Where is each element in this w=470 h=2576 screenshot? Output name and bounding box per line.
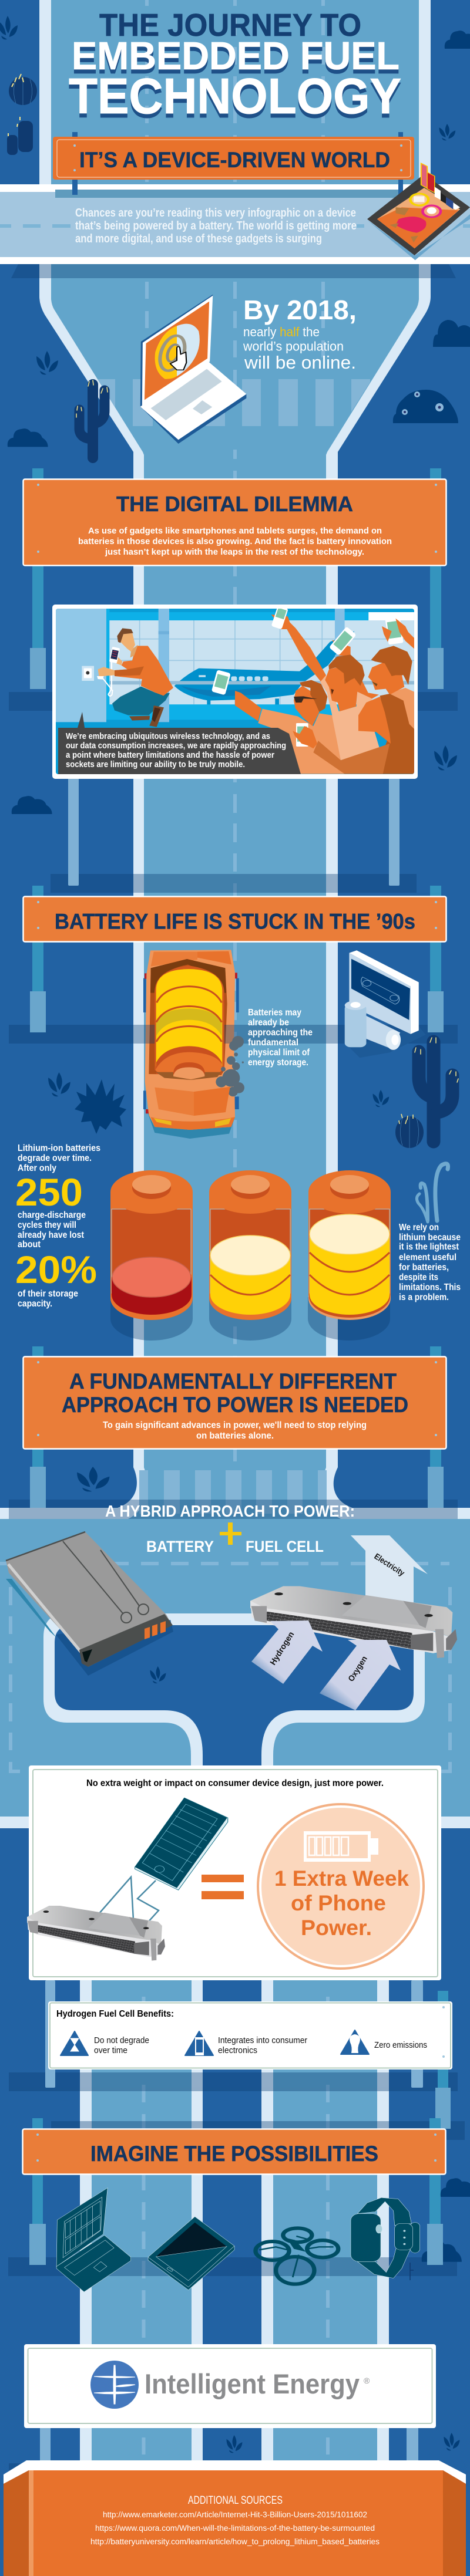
icon: laptop with globe xyxy=(140,295,246,444)
text: we rely on lithium: lithium because xyxy=(399,1233,461,1243)
shadow bands xyxy=(8,2072,465,2276)
plants bottom xyxy=(226,2433,459,2453)
footer: additional sources: http://www.emarketer.com/Article/Internet-Hit-3-Billion-Users-2015/1011602 xyxy=(103,2510,367,2519)
plus with labels battery and fuel cell: BATTERY xyxy=(146,1538,214,1555)
cell: degraded red xyxy=(110,1170,193,1320)
arrow: electricity xyxy=(351,1535,428,1602)
plants and bushes upper xyxy=(8,320,470,447)
icon: fuel cell xyxy=(250,1586,457,1658)
crowd holding phones xyxy=(235,606,414,774)
text: lithium-ion degradation stat: 20% xyxy=(15,1248,97,1291)
text: batteries may already: physical limit of xyxy=(248,1048,310,1058)
panel: airport scene xyxy=(52,605,418,779)
sign: battery life: BATTERY LIFE IS STUCK IN THE ’90s xyxy=(55,910,415,933)
title: TECHNOLOGY xyxy=(69,73,401,129)
text: lithium-ion degradation stat: capacity. xyxy=(18,1299,52,1309)
sign: a fundamentally different approach: on batteries alone. xyxy=(196,1431,274,1441)
title xyxy=(69,8,401,129)
plants: leaves and spiky bush xyxy=(48,1072,389,1134)
lower roads xyxy=(0,1828,470,2460)
icon: battery xyxy=(6,1532,173,1676)
panel: no extra weight: No extra weight or impact on consumer device design, just more power. xyxy=(86,1778,384,1788)
smoke and truck hood xyxy=(151,1036,244,1130)
benefit: do not degrade: Do not degrade xyxy=(94,2036,149,2045)
post bases and plant xyxy=(30,1467,444,1508)
equals sign xyxy=(202,1875,244,1899)
shadow band across truck xyxy=(9,1025,458,1044)
post bases xyxy=(30,991,444,1032)
benefit: integrates: Integrates into consumer xyxy=(218,2036,307,2045)
intro text: that’s being powered by a battery. The world is getting more xyxy=(75,220,357,232)
barrel cacti top left xyxy=(7,74,37,155)
shadow band junction xyxy=(9,1500,458,1519)
benefit: integrates: electronics xyxy=(218,2046,257,2055)
icon: smartwatch xyxy=(351,2197,420,2278)
cell: partial yellow xyxy=(209,1170,291,1320)
logo mark xyxy=(90,2361,139,2409)
sign: a fundamentally different approach: APPROACH TO POWER IS NEEDED xyxy=(62,1393,408,1417)
arrow: oxygen: Oxygen xyxy=(346,1654,369,1683)
sign: the digital dilemma: batteries in those devices is also growing. And the fact is battery innovation xyxy=(78,536,392,546)
text: we rely on lithium: limitations. This xyxy=(399,1282,461,1292)
panel: hydrogen fuel cell benefits: Hydrogen Fuel Cell Benefits: xyxy=(56,2009,174,2019)
callout: 1 extra week of phone power: Power. xyxy=(301,1916,372,1940)
icon: barrel cactus xyxy=(395,1114,424,1148)
text: lithium-ion degradation stat: degrade over time. xyxy=(18,1153,92,1163)
crossing strip with dashed line xyxy=(0,184,470,264)
cell: full yellow xyxy=(308,1170,391,1320)
sign: it's a device-driven world xyxy=(53,132,414,195)
intro text xyxy=(75,207,357,245)
truck cargo: batteries xyxy=(155,965,224,1080)
text: we rely on lithium: is a problem. xyxy=(399,1292,449,1302)
benefit: zero emissions xyxy=(341,2030,427,2054)
man at power socket xyxy=(97,628,173,727)
sign: the digital dilemma: THE DIGITAL DILEMMA xyxy=(116,492,353,516)
callout: 1 extra week of phone power: of Phone xyxy=(291,1891,386,1915)
sign: battery life xyxy=(24,886,446,991)
title: EMBEDDED FUEL xyxy=(72,38,400,82)
crosswalk lower xyxy=(139,1470,327,1514)
panel: airport scene: a point where battery limitations and the hassle of power xyxy=(66,751,274,760)
text: we rely on lithium: for batteries, xyxy=(399,1262,449,1272)
icon: cactus left xyxy=(76,380,108,458)
icon: cactus right xyxy=(415,1038,458,1142)
text: batteries may already: Batteries may xyxy=(248,1008,301,1018)
icon: laptop outline xyxy=(56,2188,131,2292)
plants mid xyxy=(12,745,457,814)
icon: tablet outline xyxy=(148,2217,234,2290)
text: lithium-ion degradation stat: about xyxy=(18,1240,41,1250)
title: TECHNOLOGY xyxy=(69,69,401,124)
sign: the digital dilemma: As use of gadgets like smartphones and tablets surges, the demand on xyxy=(88,526,382,536)
benefit: do not degrade: over time xyxy=(94,2046,127,2055)
text: lithium-ion degradation stat: 250 xyxy=(15,1170,83,1214)
crosswalk upper xyxy=(96,379,370,426)
arrow: electricity: Electricity xyxy=(372,1551,407,1578)
text: we rely on lithium: We rely on xyxy=(399,1223,439,1233)
plants and post bases low xyxy=(29,2178,470,2280)
sign: imagine the possibilities: IMAGINE THE POSSIBILITIES xyxy=(90,2142,378,2166)
cables from fuel cell to phone xyxy=(99,1877,159,1923)
icon: vapour wisps xyxy=(417,1164,448,1222)
icon: phone schematic xyxy=(135,1798,228,1890)
stat: by 2018 xyxy=(243,295,357,373)
callout: 1 extra week of phone power xyxy=(257,1803,425,1970)
trapezoid shadow band xyxy=(11,264,456,278)
desert plants top xyxy=(0,16,470,140)
lower junction ground xyxy=(0,1508,470,1828)
title: THE JOURNEY TO xyxy=(99,8,361,43)
dark trapezoid at road start xyxy=(11,264,456,278)
text: lithium-ion degradation stat: charge-discharge xyxy=(18,1210,86,1220)
intro text: Chances are you’re reading this very infographic on a device xyxy=(75,207,356,220)
sign: a fundamentally different approach xyxy=(24,1346,446,1467)
scene background xyxy=(56,609,414,775)
truck body xyxy=(143,950,239,1139)
sign: a fundamentally different approach: A FUNDAMENTALLY DIFFERENT xyxy=(69,1369,397,1393)
footer: additional sources: ADDITIONAL SOURCES xyxy=(188,2494,283,2507)
text: lithium-ion degradation stat xyxy=(15,1143,100,1309)
stat: by 2018: world’s population xyxy=(243,339,344,353)
shadow bands behind scene panel xyxy=(9,692,458,893)
top road xyxy=(39,0,431,184)
panel: airport scene: We’re embracing ubiquitous wireless technology, and as xyxy=(66,732,270,741)
text: lithium-ion degradation stat: of their storage xyxy=(18,1289,78,1299)
icon: cassette player and AA batteries xyxy=(345,950,425,1058)
text: batteries may already xyxy=(248,1008,313,1068)
dashed parking outline xyxy=(0,1564,450,1771)
icon: drone xyxy=(256,2228,338,2284)
text: lithium-ion degradation stat: After only xyxy=(18,1163,56,1173)
road: funnel xyxy=(39,264,431,1519)
text: lithium-ion degradation stat: cycles they will xyxy=(18,1220,76,1230)
footer: additional sources xyxy=(4,2460,466,2576)
panel: intelligent energy logo xyxy=(24,2344,436,2460)
callout: 1 extra week of phone power: 1 Extra Week xyxy=(274,1866,409,1890)
caption box xyxy=(58,712,301,774)
icon: tablet with world map xyxy=(367,163,470,260)
text: lithium-ion degradation stat: already have lost xyxy=(18,1230,85,1240)
panel: airport scene: sockets are limiting our ability to be truly mobile. xyxy=(66,760,245,769)
text: we rely on lithium xyxy=(399,1223,461,1302)
footer: additional sources: https://www.quora.com/When-will-the-limitations-of-the-battery-be-surmounted xyxy=(95,2524,375,2533)
text: batteries may already: approaching the xyxy=(248,1028,313,1038)
intro text: and more digital, and use of these gadgets is surging xyxy=(75,232,322,245)
plus with labels battery and fuel cell: FUEL CELL xyxy=(246,1538,324,1555)
post behind benefits xyxy=(435,1991,451,2129)
T-shaped island xyxy=(43,1613,425,1831)
text: lithium-ion degradation stat: Lithium-ion batteries xyxy=(18,1143,100,1153)
arrow: hydrogen: Hydrogen xyxy=(268,1630,296,1667)
text: batteries may already: fundamental xyxy=(248,1038,298,1048)
sign: the digital dilemma: just hasn’t kept up with the leaps in the rest of the technology. xyxy=(105,547,364,557)
flowers on bush xyxy=(402,391,444,415)
panel: no extra weight xyxy=(29,1765,441,2088)
footer: additional sources: http://batteryuniversity.com/learn/article/how_to_prolong_lithium_based_batteries xyxy=(90,2537,380,2546)
sign: imagine the possibilities xyxy=(22,2118,445,2224)
sign: a fundamentally different approach: To gain significant advances in power, we'll need to stop relying xyxy=(103,1420,367,1430)
text: batteries may already: already be xyxy=(248,1018,289,1028)
plus with labels battery and fuel cell xyxy=(146,1522,324,1555)
sign: the digital dilemma xyxy=(24,468,446,648)
text: we rely on lithium: it is the lightest xyxy=(399,1242,459,1252)
sign: it's a device-driven world: IT’S A DEVICE-DRIVEN WORLD xyxy=(79,148,390,172)
panel: intelligent energy logo: ® xyxy=(364,2376,370,2385)
post bases behind scene panel xyxy=(30,648,444,886)
cylinder shadows xyxy=(110,1297,390,1341)
benefit: integrates xyxy=(185,2031,307,2055)
stat: by 2018: By 2018, xyxy=(243,295,357,325)
icon: small fuel cell xyxy=(27,1906,165,1961)
stat: by 2018: nearly half the xyxy=(243,325,320,339)
benefit: do not degrade xyxy=(61,2031,149,2055)
heading: a hybrid approach to power: A HYBRID APPROACH TO POWER: xyxy=(105,1502,355,1520)
text: batteries may already: energy storage. xyxy=(248,1058,308,1068)
panel: hydrogen fuel cell benefits xyxy=(48,2001,452,2069)
text: we rely on lithium: despite its xyxy=(399,1272,438,1282)
benefit: zero emissions: Zero emissions xyxy=(374,2041,427,2050)
stat: by 2018: will be online. xyxy=(244,352,356,373)
panel: airport scene: our data consumption increases, we are rapidly approaching xyxy=(66,741,286,751)
arrow: oxygen xyxy=(320,1640,401,1710)
panel: intelligent energy logo: Intelligent Energy xyxy=(145,2368,360,2399)
title: EMBEDDED FUEL xyxy=(72,34,400,78)
road junction connector xyxy=(128,1467,341,1519)
text: we rely on lithium: element useful xyxy=(399,1252,456,1262)
arrow: hydrogen xyxy=(251,1620,323,1684)
